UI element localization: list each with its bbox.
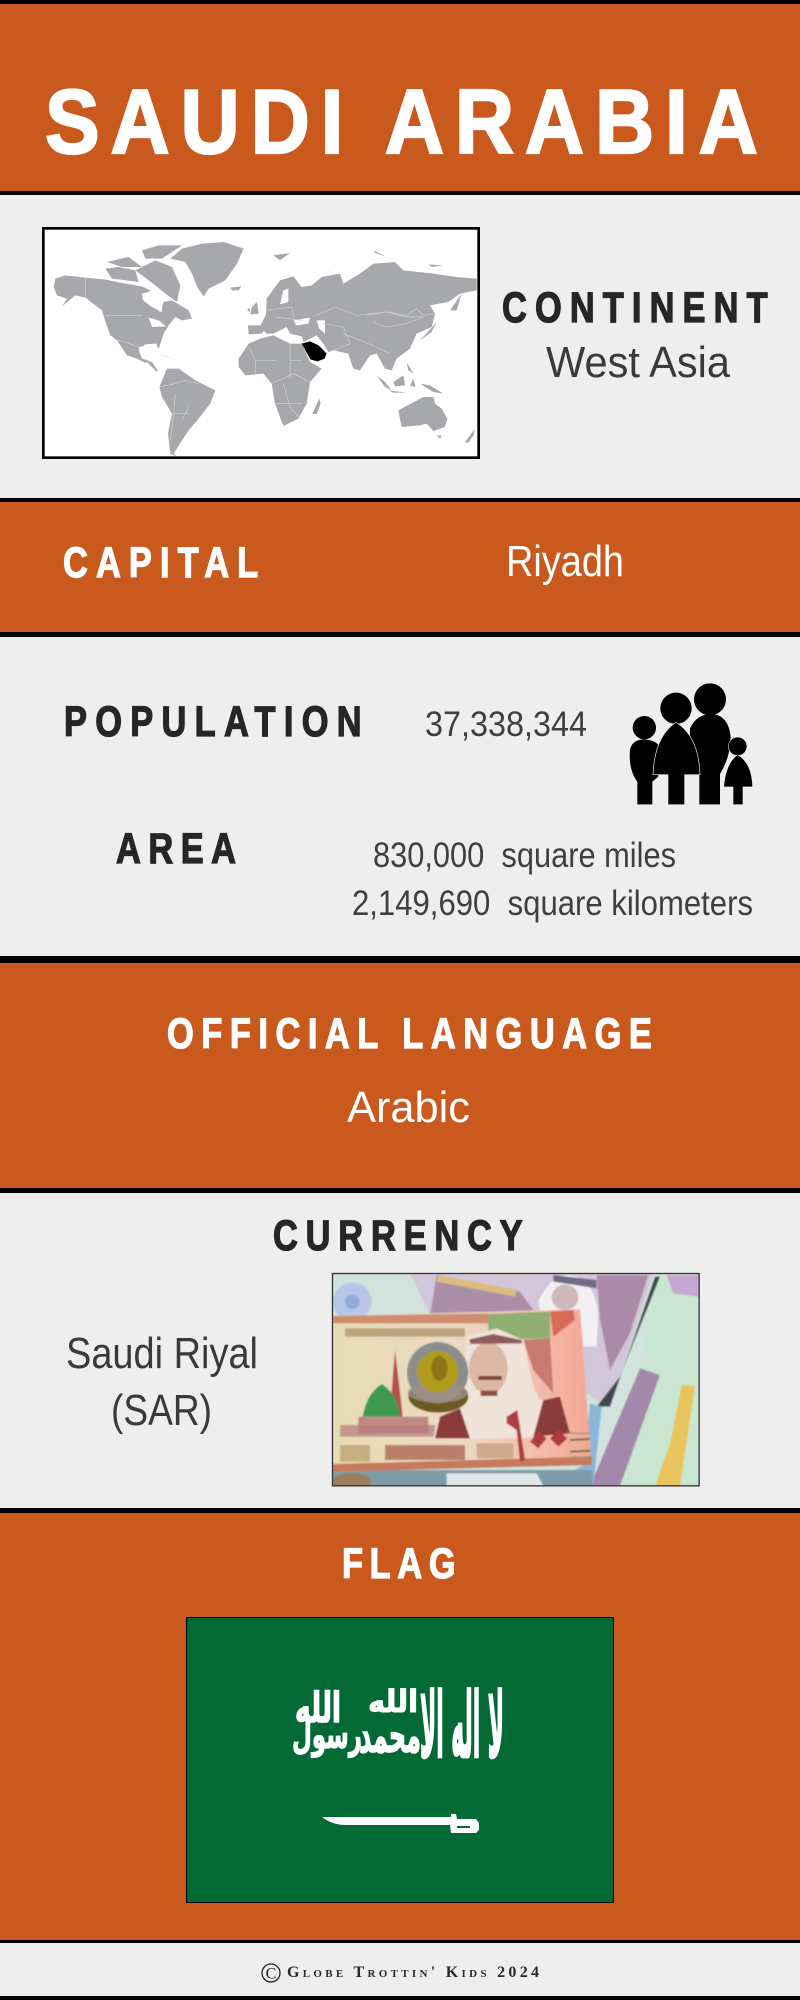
panel: official language bbox=[0, 963, 800, 1188]
icon: copyright: C bbox=[266, 1966, 276, 1982]
flag inscription: رسول bbox=[292, 1713, 362, 1758]
title: SAUDI ARABIA bbox=[45, 72, 758, 173]
credit: Globe Trottin' Kids 2024 bbox=[287, 1964, 539, 1981]
flag label: FLAG bbox=[342, 1540, 456, 1588]
flag inscription: الله bbox=[368, 1683, 418, 1720]
population label: POPULATION bbox=[64, 698, 362, 746]
language value: Arabic bbox=[347, 1083, 470, 1132]
currency name: Saudi Riyal bbox=[66, 1329, 258, 1378]
flag inscription: لا اله الا bbox=[420, 1674, 504, 1778]
flag inscription bbox=[292, 1674, 504, 1778]
currency code: (SAR) bbox=[111, 1386, 212, 1435]
area value: miles: 830,000 square miles bbox=[373, 836, 676, 875]
capital label: CAPITAL bbox=[63, 539, 258, 587]
world map bbox=[42, 227, 480, 459]
flag of Saudi Arabia bbox=[186, 1618, 614, 1902]
capital value: Riyadh bbox=[506, 537, 624, 586]
panel: continent bbox=[0, 195, 800, 498]
panel: flag bbox=[0, 1513, 800, 1940]
flag inscription: الله bbox=[295, 1685, 341, 1733]
area label: AREA bbox=[116, 825, 236, 873]
continent label: CONTINENT bbox=[502, 284, 768, 332]
panel: title band bbox=[0, 4, 800, 191]
panel: capital bbox=[0, 502, 800, 632]
panel: currency bbox=[68, 1220, 700, 1486]
panel: population and area bbox=[0, 637, 800, 956]
language label: OFFICIAL LANGUAGE bbox=[167, 1010, 652, 1058]
panel: footer bbox=[0, 1943, 800, 1996]
continent value: West Asia bbox=[546, 338, 730, 387]
currency label: CURRENCY bbox=[273, 1212, 523, 1260]
area value: kilometers: 2,149,690 square kilometers bbox=[352, 884, 753, 923]
population value: 37,338,344 bbox=[425, 705, 587, 744]
flag sword bbox=[322, 1814, 479, 1833]
banknote picture bbox=[332, 1272, 700, 1486]
icon: family bbox=[630, 683, 752, 804]
highlighted country: Saudi Arabia bbox=[302, 341, 327, 361]
icon: copyright bbox=[262, 1964, 280, 1982]
flag inscription: محمد bbox=[359, 1709, 421, 1764]
